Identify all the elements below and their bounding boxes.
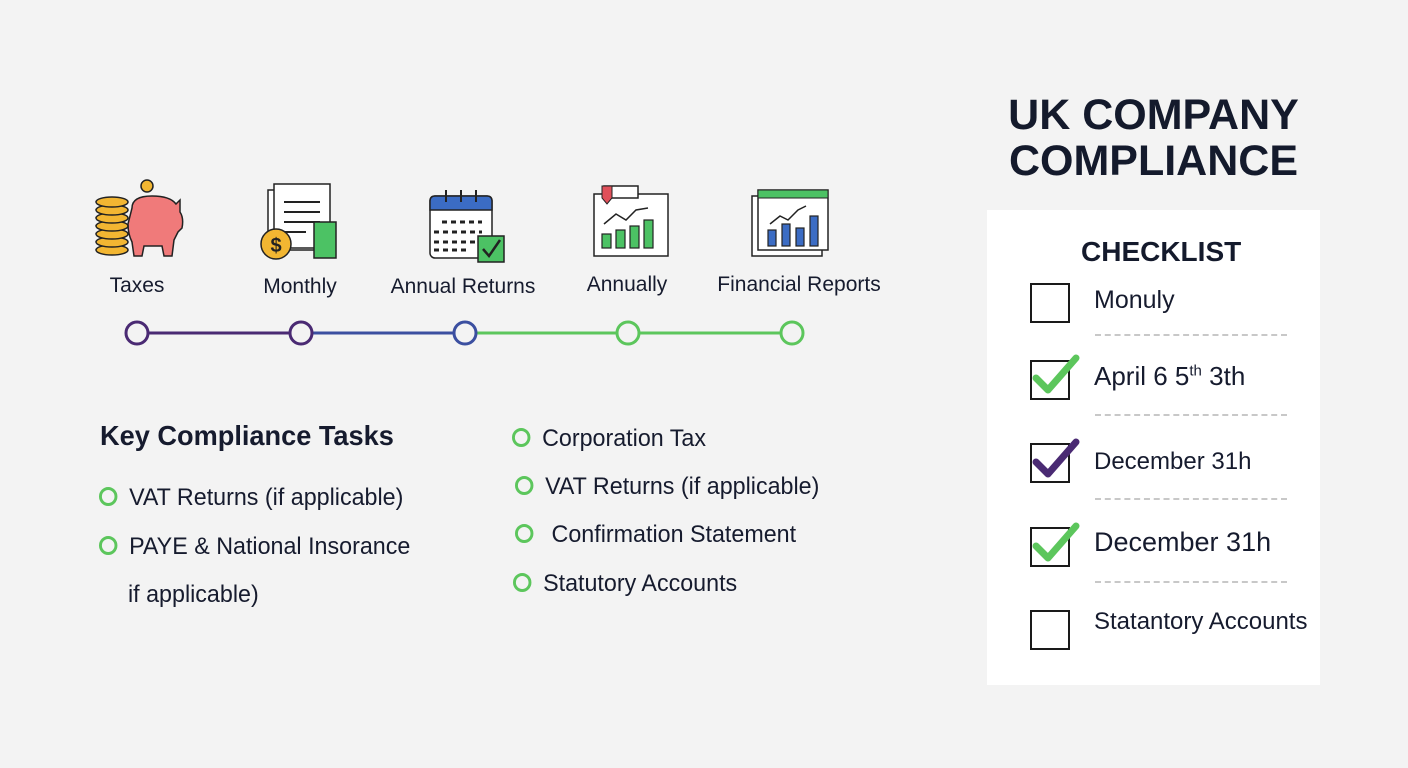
- checklist item 4: [1030, 522, 1271, 567]
- text: Confirmation Statement: [552, 521, 796, 548]
- icon: taxes piggy bank: [95, 179, 184, 257]
- list: right tasks: [512, 425, 819, 597]
- checklist item 1: [1030, 283, 1175, 323]
- label: Monthly: Monthly: [263, 275, 337, 298]
- label: Annual Returns: Annual Returns: [391, 275, 535, 298]
- heading: Key Compliance Tasks: Key Compliance Tasks: [100, 420, 394, 451]
- text: PAYE & National Insorance: [129, 533, 410, 560]
- text: April 6 5th 3th: [1094, 361, 1245, 391]
- icon: financial reports: [751, 189, 829, 257]
- icon: monthly documents: $: [270, 235, 282, 257]
- label: Taxes: Taxes: [110, 274, 164, 297]
- panel: checklist: [987, 210, 1320, 685]
- text: Corporation Tax: [542, 425, 706, 452]
- text: VAT Returns (if applicable): [129, 484, 403, 511]
- text: Monuly: [1094, 286, 1175, 314]
- icon: calendar: [429, 190, 505, 263]
- list: left tasks: [99, 484, 410, 608]
- text: if applicable): [128, 581, 259, 608]
- title: UK COMPANY: [1008, 91, 1299, 139]
- text: Statutory Accounts: [543, 570, 737, 597]
- checklist heading: CHECKLIST: [1081, 236, 1241, 267]
- icon: annually chart: [593, 185, 669, 257]
- label: Annually: Annually: [587, 273, 667, 296]
- text: VAT Returns (if applicable): [545, 473, 819, 500]
- checklist item 5: [1030, 608, 1307, 650]
- text: December 31h: [1094, 527, 1271, 557]
- icon: monthly documents: [260, 183, 337, 260]
- text: Statantory Accounts: [1094, 608, 1307, 635]
- checklist item 2: [1030, 354, 1245, 400]
- title: [1008, 91, 1299, 185]
- text: December 31h: [1094, 448, 1251, 475]
- label: Financial Reports: Financial Reports: [717, 273, 881, 296]
- checklist item 3: [1030, 438, 1251, 483]
- timeline: [124, 320, 804, 346]
- title: COMPLIANCE: [1009, 137, 1298, 185]
